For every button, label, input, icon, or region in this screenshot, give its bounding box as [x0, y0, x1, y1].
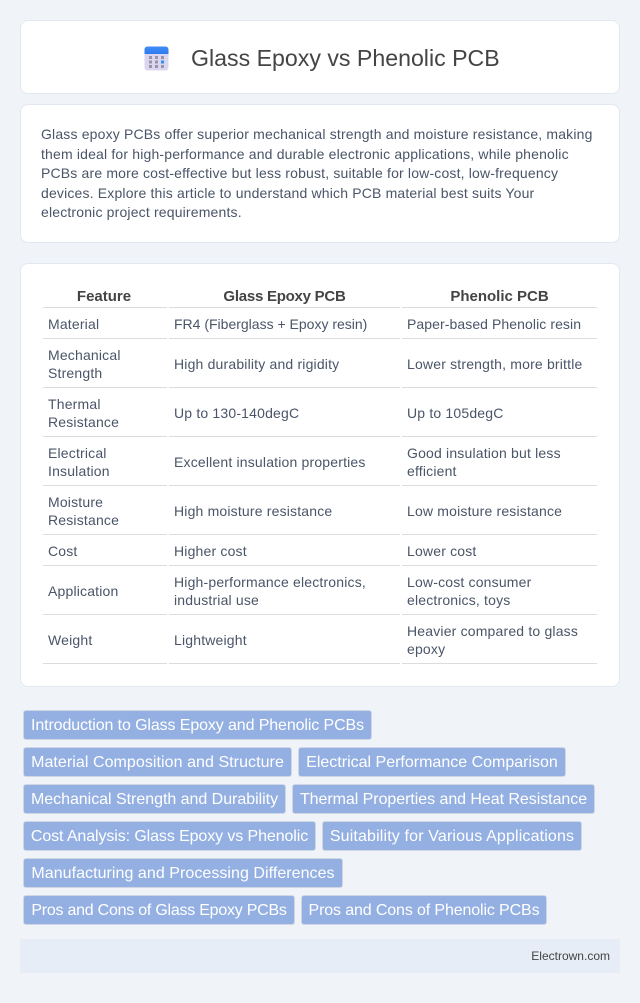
table: Paper-based Phenolic resin [407, 316, 581, 332]
table: Higher cost [174, 543, 247, 559]
table: industrial use [174, 592, 259, 608]
intro text panel [20, 104, 620, 243]
topic tags: Pros and Cons of Phenolic PCBs [309, 902, 539, 919]
table: Resistance [48, 512, 119, 528]
intro paragraph [41, 126, 593, 220]
table: Moisture [48, 494, 103, 510]
topic tags: Cost Analysis: Glass Epoxy vs Phenolic [31, 828, 308, 845]
table: Cost [48, 543, 78, 559]
topic tags: Material Composition and Structure [31, 754, 284, 771]
table: Material [48, 316, 99, 332]
table: Excellent insulation properties [174, 454, 366, 470]
table: Electrical [48, 445, 107, 461]
table: Mechanical [48, 347, 121, 363]
table: High moisture resistance [174, 503, 332, 519]
table: Thermal [48, 396, 101, 412]
icon: calendar grid [144, 46, 168, 70]
table: Low moisture resistance [407, 503, 562, 519]
footer bar [20, 939, 620, 973]
table: High durability and rigidity [174, 356, 339, 372]
intro paragraph: PCBs are more cost-effective but less robust, suitable for low-cost, low-frequency [41, 165, 558, 181]
table: Good insulation but less [407, 445, 561, 461]
table: Up to 105degC [407, 405, 504, 421]
table: Lower strength, more brittle [407, 356, 582, 372]
comparison table panel [20, 263, 620, 687]
table [43, 288, 597, 664]
topic tags: Suitability for Various Applications [330, 828, 574, 845]
intro paragraph: them ideal for high-performance and durable electronic applications, while phenolic [41, 146, 569, 162]
table: Glass Epoxy PCB [223, 288, 346, 305]
intro paragraph: electronic project requirements. [41, 204, 242, 220]
table: electronics, toys [407, 592, 510, 608]
table: Phenolic PCB [450, 288, 549, 305]
table: Strength [48, 365, 102, 381]
table: Up to 130-140degC [174, 405, 299, 421]
table: Lower cost [407, 543, 476, 559]
topic tags: Thermal Properties and Heat Resistance [300, 791, 587, 808]
table: Insulation [48, 463, 110, 479]
table: High-performance electronics, [174, 574, 366, 590]
table: Low-cost consumer [407, 574, 531, 590]
table: efficient [407, 463, 457, 479]
title: Glass Epoxy vs Phenolic PCB [191, 45, 500, 71]
topic tags: Electrical Performance Comparison [306, 754, 558, 771]
topic tags: Pros and Cons of Glass Epoxy PCBs [31, 902, 287, 919]
table: Weight [48, 632, 92, 648]
topic tags: Introduction to Glass Epoxy and Phenolic PCBs [31, 717, 364, 734]
table: FR4 (Fiberglass + Epoxy resin) [174, 316, 367, 332]
table: Heavier compared to glass [407, 623, 578, 639]
intro paragraph: devices. Explore this article to understand which PCB material best suits Your [41, 184, 534, 200]
table: epoxy [407, 641, 445, 657]
table: Lightweight [174, 632, 247, 648]
footer credit: Electrown.com [531, 949, 610, 963]
table: Application [48, 583, 118, 599]
topic tags: Mechanical Strength and Durability [31, 791, 278, 808]
intro paragraph: Glass epoxy PCBs offer superior mechanical strength and moisture resistance, making [41, 126, 593, 142]
topic tags: Manufacturing and Processing Differences [31, 865, 335, 882]
table: Resistance [48, 414, 119, 430]
title card [20, 20, 620, 94]
table: Feature [77, 288, 131, 305]
topic tags [23, 710, 595, 925]
